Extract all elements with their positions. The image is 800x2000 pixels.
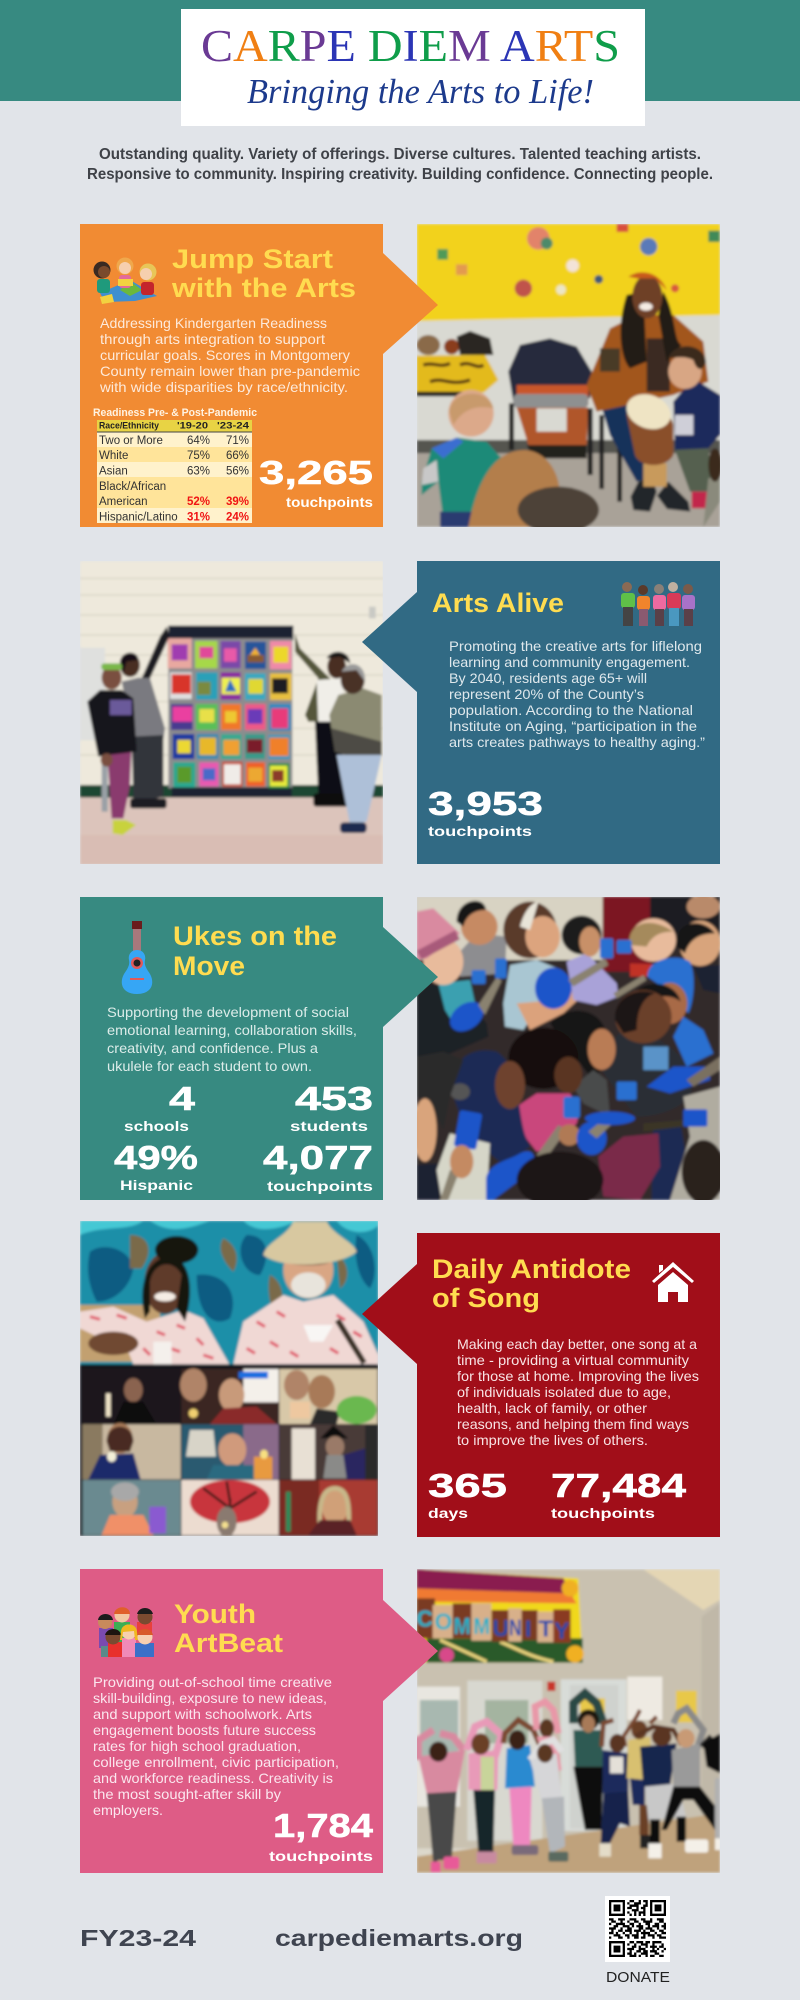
description: and support with schoolwork. Arts: [93, 1706, 312, 1722]
description: Providing out-of-school time creative: [93, 1674, 332, 1690]
description: population. According to the National: [449, 702, 693, 718]
logo wordmark: CARPE DIEM ARTS: [201, 21, 620, 71]
icon: ukulele: [122, 921, 152, 994]
description: Promoting the creative arts for liflelong: [449, 638, 702, 654]
description: reasons, and helping them find ways: [457, 1416, 689, 1432]
readiness table: 56%: [226, 466, 249, 478]
readiness table: 64%: [187, 435, 210, 447]
description: emotional learning, collaboration skills,: [107, 1022, 357, 1038]
stat: students: students: [290, 1118, 368, 1134]
stat: Hispanic: 49%: [114, 1139, 198, 1176]
description: engagement boosts future success: [93, 1722, 316, 1738]
stat: touchpoints: 1,784: [273, 1807, 374, 1844]
panel: Ukes on the Move: [80, 897, 438, 1200]
description: ukulele for each student to own.: [107, 1058, 312, 1074]
stat: days: 365: [428, 1467, 507, 1504]
intro text: Outstanding quality. Variety of offerings. Diverse cultures. Talented teaching artists.: [99, 146, 701, 163]
description: of individuals isolated due to age,: [457, 1384, 671, 1400]
stat: touchpoints: 77,484: [551, 1467, 687, 1504]
description: through arts integration to support: [100, 331, 325, 347]
photo: children posing under Community mural: U: [493, 1615, 509, 1641]
QR code: [605, 1896, 670, 1962]
description: college enrollment, civic participation,: [93, 1754, 339, 1770]
table heading: Readiness Pre- & Post-Pandemic: [93, 407, 257, 419]
heading: Move: [173, 951, 245, 981]
heading: Ukes on the: [173, 921, 337, 951]
heading: ArtBeat: [174, 1628, 283, 1658]
logo card: [181, 9, 645, 126]
readiness table: 39%: [226, 496, 249, 508]
description: [457, 1336, 699, 1448]
description: health, lack of family, or other: [457, 1400, 647, 1416]
heading: of Song: [432, 1283, 540, 1313]
photo: children posing under Community mural: O: [435, 1608, 452, 1634]
stat: touchpoints: touchpoints: [286, 494, 373, 510]
description: [107, 1004, 357, 1074]
stat: touchpoints: [428, 785, 543, 839]
stat: schools: 4: [169, 1080, 196, 1117]
readiness table: Asian: [99, 466, 128, 478]
stat: touchpoints: [551, 1467, 687, 1521]
description: Supporting the development of social: [107, 1004, 349, 1020]
readiness table: Two or More: [99, 435, 163, 447]
stat: days: days: [428, 1505, 468, 1521]
photo: seniors displaying a colorful quilt: [80, 561, 383, 865]
readiness table: White: [99, 450, 128, 462]
description: Making each day better, one song at a: [457, 1336, 697, 1352]
photo: children posing under Community mural: C: [417, 1606, 433, 1632]
intro text: [87, 146, 713, 183]
photo: children posing under Community mural: T: [538, 1616, 553, 1642]
heading: [174, 1599, 283, 1658]
stat: Hispanic: [114, 1139, 198, 1193]
stat: Hispanic: Hispanic: [120, 1177, 193, 1193]
description: creativity, and confidence. Plus a: [107, 1040, 318, 1056]
readiness table: 66%: [226, 450, 249, 462]
intro text: Responsive to community. Inspiring creativity. Building confidence. Connecting people.: [87, 166, 713, 183]
readiness table: 63%: [187, 466, 210, 478]
readiness table: [97, 420, 252, 524]
stat: schools: schools: [124, 1118, 189, 1134]
photo: Daily Antidote video call screenshot: [80, 1221, 378, 1537]
readiness table: 31%: [187, 512, 210, 524]
readiness table: 24%: [226, 512, 249, 524]
readiness table: 75%: [187, 450, 210, 462]
description: represent 20% of the County’s: [449, 686, 644, 702]
readiness table: 71%: [226, 435, 249, 447]
stat: touchpoints: 3,953: [428, 785, 543, 822]
stat: touchpoints: touchpoints: [551, 1505, 655, 1521]
heading: Arts Alive: [432, 588, 564, 618]
photo: children posing under Community mural: M: [473, 1613, 490, 1639]
panel: Youth ArtBeat: [80, 1569, 438, 1873]
stat: schools: [124, 1080, 196, 1134]
stat: touchpoints: touchpoints: [269, 1848, 373, 1864]
icon: children with puzzle: [94, 258, 157, 304]
heading: with the Arts: [171, 273, 356, 303]
description: the most sought-after skill by: [93, 1786, 281, 1802]
readiness table: 52%: [187, 496, 210, 508]
heading: Jump Start: [172, 244, 333, 274]
description: Addressing Kindergarten Readiness: [100, 315, 327, 331]
footer: fiscal year: FY23-24: [80, 1925, 196, 1951]
donate label: DONATE: [606, 1969, 670, 1986]
stat: touchpoints: [259, 454, 373, 510]
readiness table: Black/African: [99, 481, 166, 493]
description: with wide disparities by race/ethnicity.: [99, 379, 348, 395]
description: to improve the lives of others.: [457, 1432, 648, 1448]
icon: group of children: [98, 1607, 154, 1657]
heading: [173, 921, 337, 981]
footer: website: carpediemarts.org: [275, 1925, 523, 1951]
stat: touchpoints: touchpoints: [428, 823, 532, 839]
description: County remain lower than pre-pandemic: [100, 363, 360, 379]
description: arts creates pathways to healthy aging.”: [449, 734, 705, 750]
readiness table: '19-20: [177, 420, 208, 432]
photo: drumming teaching artist with toddlers: [417, 224, 722, 533]
stat: touchpoints: 3,265: [259, 454, 373, 491]
readiness table: Hispanic/Latino: [99, 512, 178, 524]
stat: students: [290, 1080, 373, 1134]
readiness table: American: [99, 496, 148, 508]
description: employers.: [93, 1802, 163, 1818]
panel: Arts Alive: [362, 561, 720, 864]
description: time - providing a virtual community: [457, 1352, 689, 1368]
photo: children posing under Community mural: M: [453, 1613, 471, 1639]
panel: Daily Antidote of Song: [362, 1233, 720, 1537]
description: skill-building, exposure to new ideas,: [93, 1690, 327, 1706]
readiness table: Race/Ethnicity: [99, 420, 160, 432]
panel: Jump Start with the Arts: [80, 224, 438, 527]
heading: [432, 1254, 631, 1313]
photo: children posing under Community mural: [417, 1569, 720, 1873]
stat: days: [428, 1467, 507, 1521]
photo: children posing under Community mural: I: [525, 1616, 531, 1642]
description: By 2040, residents age 65+ will: [449, 670, 647, 686]
stat: touchpoints: 4,077: [263, 1139, 373, 1176]
description: rates for high school graduation,: [93, 1738, 301, 1754]
heading: Daily Antidote: [432, 1254, 631, 1284]
description: curricular goals. Scores in Montgomery: [100, 347, 350, 363]
logo tagline: Bringing the Arts to Life!: [247, 72, 594, 111]
description: for those at home. Improving the lives: [457, 1368, 699, 1384]
description: Institute on Aging, “participation in the: [449, 718, 697, 734]
stat: touchpoints: [263, 1139, 373, 1194]
description: [449, 638, 705, 750]
stat: touchpoints: [269, 1807, 374, 1864]
description: and workforce readiness. Creativity is: [93, 1770, 333, 1786]
readiness table: '23-24: [217, 420, 250, 432]
photo: students playing blue ukuleles: [413, 895, 725, 1208]
heading: Youth: [174, 1599, 256, 1629]
photo: children posing under Community mural: Y: [554, 1618, 569, 1644]
heading: [171, 244, 356, 303]
icon: house: [652, 1262, 694, 1302]
stat: touchpoints: touchpoints: [267, 1178, 373, 1194]
description: [93, 1674, 339, 1818]
description: [99, 315, 360, 395]
stat: students: 453: [295, 1080, 373, 1117]
photo: children posing under Community mural: N: [509, 1614, 522, 1640]
header band with logo: [0, 0, 800, 126]
description: learning and community engagement.: [449, 654, 690, 670]
icon: group of seniors: [621, 582, 695, 626]
